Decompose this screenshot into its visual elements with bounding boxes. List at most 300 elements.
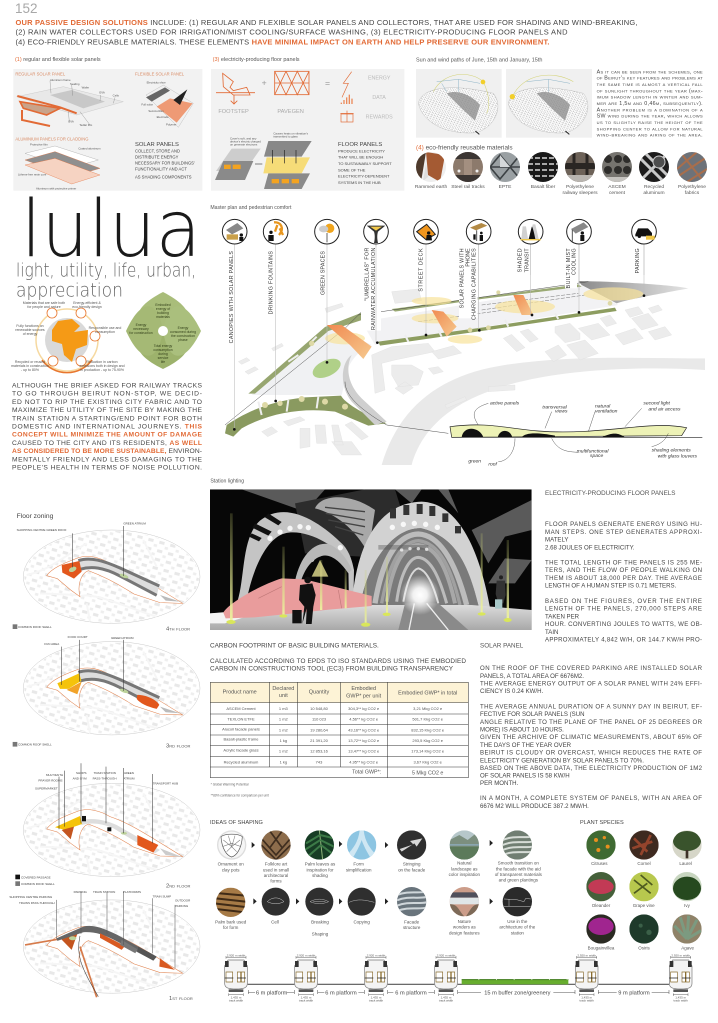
shaping captions: simplification — [346, 867, 372, 872]
silhouettes — [292, 575, 506, 624]
shaping captions: and green plantings — [499, 878, 539, 883]
icon: floor panel layers: Causes heats on vibration's — [273, 132, 309, 136]
icon: breaking — [305, 888, 333, 916]
plant captions: Agave — [681, 945, 695, 950]
shaping captions: for form — [223, 925, 239, 930]
diagram: green energy clover: building — [157, 311, 169, 315]
table: carbon footprint: Basalt-plastic frame — [223, 737, 259, 742]
panel: electricity-producing floor panels: (3) electricity-producing floor panels — [213, 57, 300, 63]
icon: drinking fountains — [263, 219, 288, 244]
callout icons and labels — [222, 219, 656, 431]
table: carbon footprint: 304,3** kg CO2 e — [348, 706, 380, 711]
icon: energy, data, rewards: ENERGY — [368, 75, 391, 81]
intro heading: (4) ECO-FRIENDLY REUSABLE MATERIALS. THESE ELEMENTS HAVE MINIMAL IMPACT ON EARTH AND HELP PRESERVE OUR ENVIRONMENT. — [16, 37, 550, 46]
diagram: globe of sustainability goals: of energy — [23, 332, 38, 336]
heading: plant species: PLANT SPECIES — [580, 820, 624, 826]
panel: floor zoning, 2nd floor: MULTIFAITH — [46, 773, 63, 777]
station roof and plaza — [225, 281, 688, 437]
shaping captions: forms — [270, 879, 282, 884]
table: carbon footprint: ASCEM Cement — [226, 706, 257, 711]
diagram: green energy clover: Energy — [178, 326, 189, 330]
plant: osiris — [629, 914, 659, 944]
icon: umbrellas — [364, 219, 388, 244]
icon: energy, data, rewards: REWARDS — [366, 114, 393, 120]
plant: ivy — [672, 872, 702, 901]
vertical callout labels: SHADED — [518, 248, 524, 272]
panel: floor zoning, 1st floor — [9, 890, 200, 1002]
section sketch: green — [468, 458, 481, 464]
intro heading: OUR PASSIVE DESIGN SOLUTIONS INCLUDE: (1) REGULAR AND FLEXIBLE SOLAR PANELS AND COLLECTORS, THAT ARE USED FOR SHADING AND WIND-BREAKING, — [16, 18, 638, 27]
shaping captions: clay pots — [222, 867, 240, 872]
panel: floor zoning, 2nd floor — [15, 763, 200, 889]
diagram: globe of sustainability goals: for people and nature — [27, 305, 61, 309]
floor panels description: SYSTEMS IN THE HUB — [338, 180, 381, 185]
solar panels description: COLLECT, STORE AND — [135, 149, 180, 154]
material: ETFE — [490, 152, 520, 182]
table: carbon footprint: GWP* per unit — [346, 694, 382, 700]
vertical callout labels — [229, 245, 644, 343]
panel: floor zoning, 4th floor: 4th floor — [166, 626, 190, 632]
shaping captions: Shaping — [312, 932, 329, 937]
solar panels description — [135, 142, 195, 179]
table: carbon footprint: Embodied — [351, 686, 376, 692]
2nd floor zones — [55, 763, 183, 857]
text: floor panels explanation: LENGTH OF THE PANELS, 270,000 STEPS ARE — [545, 606, 702, 612]
shaping captions: structure — [403, 925, 421, 930]
icon: flexible solar panel — [141, 80, 193, 127]
panel: floor zoning, 2nd floor: AND GYM — [73, 777, 87, 781]
shaping captions: shading — [312, 873, 328, 878]
shaping captions: Use in the — [507, 919, 528, 924]
plant: agave — [672, 914, 702, 944]
section sketch: roof — [488, 462, 498, 468]
text: solar panel explanation: FECTIVE FOR SOLAR PANELS (SUN — [480, 711, 585, 718]
vertical callout labels: RAINWATER ACCUMULATION — [371, 248, 377, 330]
icon: street deck — [414, 219, 438, 244]
diagram: globe of sustainability goals: in production - up to 75-90% — [80, 368, 124, 372]
icon: use in architecture — [503, 887, 532, 916]
section sketch: shading elements — [652, 448, 691, 454]
image: palm bark — [216, 888, 245, 917]
solar panels description: FUNCTIONALITY AND ACT — [135, 167, 187, 172]
text: solar panel explanation: PER MONTH. — [480, 780, 519, 787]
subtitle: appreciation — [16, 280, 123, 302]
icon: aluminium cladding panels — [18, 142, 101, 191]
table: carbon footprint: 501,7 Kkg CO2 e — [412, 717, 444, 722]
solar panels description: SOLAR PANELS — [135, 142, 179, 148]
icon: regular solar panel: Tedlar film — [79, 123, 93, 127]
diagram: globe of sustainability goals: renewable sources — [15, 328, 45, 332]
heading: solar panel: SOLAR PANEL — [480, 642, 524, 650]
diagram: globe of sustainability goals: Energy-efficient & — [73, 301, 101, 305]
icon: copying — [348, 888, 376, 916]
table: carbon footprint: 10 548,80 — [310, 706, 329, 711]
diagram: green energy clover: consumed during — [170, 330, 196, 334]
icon: floor panel layers: Cover's soft, and any — [230, 137, 257, 141]
icon: flexible solar panel: Electricity shoe — [147, 80, 166, 84]
text: floor panels explanation: 2.68 JOULES OF ELECTRICITY. — [545, 544, 635, 552]
panel: floor zoning, 3rd floor: FOOD COURT — [68, 635, 88, 639]
shaping captions: Facade — [404, 919, 420, 924]
subtitle: light, utility, life, urban, — [16, 260, 196, 282]
surrounding buildings — [238, 289, 672, 455]
text: solar panel explanation: PANELS, A TOTAL AREA OF 6676M2. — [480, 673, 584, 680]
shaping captions: Natural — [457, 861, 472, 866]
table: carbon footprint: 1 m3 — [279, 706, 289, 711]
table: carbon footprint: 13,47** kg CO2 e — [348, 749, 380, 754]
plant captions: Bougainvillea — [588, 945, 615, 950]
heading: carbon footprint: CALCULATED ACCORDING TO EPDS TO ISO STANDARDS USING THE EMBODIED — [210, 658, 466, 665]
shaping captions: Folklore art — [265, 862, 288, 867]
heading: electricity-producing floor panels: ELECTRICITY-PRODUCING FLOOR PANELS — [545, 490, 676, 497]
table: carbon footprint: Embodied GWP* in total — [398, 690, 457, 696]
vertical callout labels: PARKING — [635, 248, 641, 273]
vertical callout labels: PHONE — [465, 248, 471, 267]
plant: laurel — [672, 830, 702, 860]
table: carbon footprint: 43,16** kg CO2 e — [348, 727, 380, 732]
table: carbon footprint: 19 280,64 — [310, 727, 329, 732]
table: carbon footprint: 832,15 Kkg CO2 e — [411, 727, 445, 732]
shaping captions: landscape as — [451, 866, 478, 871]
shaping captions: inspiration for — [307, 867, 334, 872]
paths and trees across the green strips — [258, 313, 558, 415]
4th floor zones — [62, 526, 180, 602]
plant: bougainvillea — [586, 914, 616, 944]
floor panels description: TO SUSTAINABLY SUPPORT — [338, 161, 392, 166]
interior of right arch — [360, 528, 479, 607]
diagram: green energy clover: the construction — [171, 334, 195, 338]
icon: flexible solar panel: Polymer — [166, 122, 176, 126]
section sketch — [450, 400, 702, 468]
material captions: cement — [609, 190, 626, 196]
icon: floor panel layers: device's electric charged — [230, 140, 261, 144]
table: carbon footprint: **80% confidence for comparison per unit — [211, 793, 269, 797]
text: sun and wind description: of sunlight throughout the year (max- — [597, 88, 703, 94]
material: polyethylene fabrics — [677, 152, 707, 182]
panel: floor zoning, 3rd floor: COMMON ROOF SHELL — [18, 743, 52, 747]
diagram: globe of sustainability goals: materials in construction — [11, 364, 49, 368]
section sketch: active panels — [490, 400, 520, 406]
panel: electricity-producing floor panels — [211, 57, 404, 191]
panel: floor zoning, 2nd floor: PRAYER ROOMS — [38, 779, 62, 783]
table: carbon footprint: unit — [279, 693, 288, 699]
panel: floor zoning, 4th floor: SHOPPING CENTRE GREEN ROOF — [17, 528, 67, 532]
panel: floor zoning, 1st floor: OUTDOOR — [175, 899, 191, 903]
panel: sun and wind paths — [416, 57, 703, 139]
icon: regular solar panel: EVA — [68, 119, 74, 123]
heading: carbon footprint: CARBON FOOTPRINT OF BASIC BUILDING MATERIALS. — [210, 642, 379, 650]
icon: pavegen grid — [275, 71, 309, 95]
image: natural landscape — [450, 830, 479, 860]
table: carbon footprint: 13,72** kg CO2 e — [348, 738, 380, 743]
text: sun and wind description — [597, 69, 703, 139]
material captions: Polyethylene — [566, 184, 594, 190]
image: smooth transition facade — [503, 830, 532, 860]
icon: regular solar panel: Aluminum frame — [50, 78, 71, 82]
back arch — [315, 497, 375, 553]
right arch — [352, 502, 490, 607]
panel: master plan and pedestrian comfort — [210, 205, 705, 468]
diagram: green energy clover: energy of — [156, 307, 170, 311]
solar panels description: DISTRIBUTE ENERGY — [135, 155, 179, 160]
panel: floor zoning, 4th floor: GREEN ATRIUM — [123, 522, 146, 526]
panel: floor zoning, 1st floor: PLATFORMS — [123, 890, 141, 894]
material captions: EPTE — [499, 184, 512, 190]
icon: floor panel layers — [215, 132, 312, 189]
icon: regular solar panel: EVA — [99, 90, 105, 94]
solar panels description: NECESSARY FOR BUILDINGS' — [135, 161, 195, 166]
shaping captions: Ornament on — [218, 862, 244, 867]
icon: energy, data, rewards: DATA — [372, 95, 386, 101]
diagram: green energy clover: phase — [178, 338, 188, 342]
plant captions: Citruses — [591, 861, 608, 866]
vertical callout labels: CANOPIES WITH SOLAR PANELS — [229, 251, 235, 343]
text: floor panels explanation — [545, 521, 702, 644]
sun exposure zones — [325, 287, 643, 359]
panel: floor zoning, 2nd floor: TRANSPORT HUB — [153, 782, 178, 786]
shaping captions: Copying — [353, 919, 370, 924]
panel: regular and flexible solar panels: ALUMINIUM PANELS FOR CLADDING — [15, 136, 88, 141]
table: carbon footprint: 12 853,16 — [310, 749, 329, 754]
text: sun and wind description: of Beirut's key features and problems at — [597, 76, 703, 82]
icon: cell — [262, 888, 290, 916]
panel: floor zoning, 2nd floor: GREEN — [123, 771, 134, 775]
material captions — [415, 184, 706, 196]
text: floor panels explanation: TAIN — [545, 629, 558, 636]
text: floor panels explanation: THEM IS ABOUT 18,000 PER DAY. THE AVERAGE — [545, 575, 702, 582]
material captions: railway sleepers — [562, 190, 598, 196]
track section: 6 m platform — [256, 991, 288, 997]
plant captions: Osiris — [638, 945, 650, 950]
panel: regular and flexible solar panels: FLEXIBLE SOLAR PANEL — [135, 71, 185, 76]
diagram: globe of sustainability goals: eco-friendly design — [72, 305, 102, 309]
flow arrows — [252, 840, 493, 904]
icon: flexible solar panel: Semiconflex — [148, 109, 164, 113]
chart: January sun path — [508, 75, 588, 134]
table: carbon footprint: 293,5 Kkg CO2 e — [412, 738, 444, 743]
table: carbon footprint: Declared — [272, 686, 294, 692]
title: lulua: lulua — [21, 185, 201, 275]
text: floor panels explanation: TAKEN PER — [545, 614, 580, 620]
panel: floor zoning, 1st floor: TRAIN STATION — [93, 890, 115, 894]
text: floor panels explanation: THE TOTAL LENGTH OF THE PANELS IS 255 ME- — [545, 560, 702, 566]
panel: plant species — [586, 830, 702, 950]
table: carbon footprint: 4,56** kg CO2 e — [349, 717, 379, 722]
plant: citruses — [586, 830, 616, 860]
shaping captions: Cell — [271, 919, 279, 924]
section sketch: second light — [643, 400, 671, 406]
section sketch: natural — [595, 403, 611, 409]
shaping captions: used in small — [263, 867, 289, 872]
shaping captions: design features — [449, 930, 480, 935]
section sketch: transversal — [542, 404, 568, 410]
text: concept description: MENTALLY FRIENDLY AND LESS DAMAGING TO THE — [12, 456, 203, 463]
diagram: green energy clover: Energy — [136, 323, 147, 327]
panel: floor zoning, 4th floor: COMMON ROOF SHELL — [18, 625, 52, 629]
panel: regular and flexible solar panels: (1) regular and flexible solar panels — [15, 57, 101, 63]
image: folklore art — [261, 830, 291, 860]
second left arch — [294, 544, 352, 585]
plant captions: Ivy — [684, 903, 691, 908]
table: carbon footprint: 21 391,20 — [310, 738, 329, 743]
section sketch: with glass louvers — [658, 454, 698, 460]
plant captions: Cornel — [637, 861, 651, 866]
floor panels description: SOME OF THE — [338, 167, 366, 172]
vertical callout labels: DRINKING FOUNTAINS — [269, 251, 275, 314]
icon: flexible solar panel: Electrode — [157, 115, 169, 119]
image: palm leaves — [305, 830, 334, 860]
text: solar panel explanation: THE AVERAGE ENERGY OUTPUT OF A SOLAR PANEL WITH 24% EFFI- — [480, 680, 702, 688]
text: floor panels explanation: BASED ON THE FIGURES, OVER THE ENTIRE — [545, 598, 702, 605]
text: solar panel explanation: IN A MONTH, A COMPLETE SYSTEM OF PANELS, WITH AN AREA OF — [480, 795, 702, 802]
diagram: globe of sustainability goals — [11, 301, 125, 373]
diagram: green energy clover: for construction — [129, 331, 153, 335]
image: form simplification — [347, 830, 376, 860]
shaping captions: Smooth transition on — [498, 861, 539, 866]
text: solar panel explanation: GIVEN THE ARCHIVE OF CLIMATIC MEASUREMENTS, ABOUT 65% OF — [480, 734, 702, 741]
floor panels description: ELECTRICITY-DEPENDENT — [338, 174, 390, 179]
panel: floor zoning, 1st floor: PARKING — [74, 890, 88, 894]
shaping captions: station — [511, 930, 524, 935]
text: floor panels explanation: LENGTH OF A HUMAN STEP IS 0.71 METERS. — [545, 582, 677, 590]
panel: regular and flexible solar panels: REGULAR SOLAR PANEL — [15, 71, 66, 76]
icon: canopies — [222, 219, 247, 244]
table: carbon footprint: 5 Mkg CO2 e — [412, 771, 443, 777]
shaping captions: Nature — [458, 919, 472, 924]
panel: floor zoning, 2nd floor: COMMON ROOF SHELL — [21, 882, 55, 886]
icon: regular solar panel: Wafer — [82, 86, 89, 90]
table: carbon footprint: 1 kg — [280, 738, 287, 743]
icon: aluminium cladding panels: Aluminum with protective primer — [36, 187, 76, 191]
material captions: Polyethylene — [678, 184, 706, 190]
diagram: green energy clover: service — [158, 356, 168, 360]
panel: floor zoning, 3rd floor: 3rd floor — [166, 743, 191, 749]
text: concept description: MAXIMIZE THE UTILITY OF THE SITE BY MAKING THE — [12, 407, 203, 414]
panel: floor zoning, 2nd floor: PASS-THROUGH — [93, 777, 116, 781]
floor panels description: THAT WILL BE ENOUGH — [338, 155, 383, 160]
panel: electricity-producing floor panels: PAVEGEN — [277, 109, 304, 115]
text: sun and wind description: Another problem is a domination of a — [597, 107, 703, 113]
table: carbon footprint: * Global Warming Potential — [211, 783, 249, 787]
icon: green spaces — [315, 219, 339, 244]
text: concept description: PEOPLE'S HEALTH IN TERMS OF NOISE POLLUTION. — [12, 464, 202, 472]
text: solar panel explanation: ON THE ROOF OF THE COVERED PARKING ARE INSTALLED SOLAR — [480, 665, 703, 672]
material: polyethylene railway sleepers — [565, 152, 595, 182]
eco-friendly reusable materials: (4) eco-friendly reusable materials — [416, 144, 513, 152]
image: facade structure — [397, 887, 426, 916]
icon: regular solar panel: Sealing — [70, 82, 80, 86]
icon: footstep — [216, 73, 255, 104]
table: carbon footprint: Recycled aluminum — [224, 759, 259, 764]
diagram: green energy clover: Embodied — [155, 303, 171, 307]
panel: floor zoning, 3rd floor: GREEN ATRIUM — [111, 636, 134, 640]
panel: electricity-producing floor panels: = — [325, 78, 330, 88]
3rd floor zones — [57, 640, 180, 713]
material captions: Steel rail tracks — [451, 184, 485, 190]
panel: floor zoning, 2nd floor: SHOPS — [76, 771, 86, 775]
shaping captions: Form — [353, 862, 364, 867]
material captions: fabrics — [685, 190, 700, 196]
table: carbon footprint: 1 kg — [280, 759, 287, 764]
table: carbon footprint: 3,21 Mkg CO2 e — [413, 706, 443, 711]
text: floor panels explanation: FLOOR PANELS GENERATE ENERGY USING HU- — [545, 521, 702, 528]
table: carbon footprint: Quantity — [309, 690, 329, 696]
heading: ideas of shaping: IDEAS OF SHAPING — [210, 820, 263, 826]
shaping captions: of transparent materials — [495, 872, 543, 877]
icon: aluminium cladding panels: Protective film — [30, 142, 48, 146]
icon: aluminium cladding panels: Lithene-free resin core — [18, 172, 47, 176]
diagram: green energy clover: materials — [156, 315, 170, 319]
table: carbon footprint: 1 m2 — [279, 727, 289, 732]
text: sun and wind description: the same time is almost a vertical fall — [597, 82, 703, 88]
shaping captions: wonders as — [453, 925, 477, 930]
icon: floor panel layers: on generate electrons — [230, 143, 258, 147]
panel: floor zoning, 2nd floor: TRAIN STATION — [94, 771, 116, 775]
panel: floor zoning, 2nd floor: 2nd floor — [166, 883, 191, 889]
panel: floor zoning, 1st floor: SHOPPING CENTRE PARKING — [9, 895, 53, 899]
platform floor — [210, 605, 532, 630]
text: solar panel explanation: BASED ON THE ABOVE DATA, THE ELECTRICITY PRODUCTION OF 1M2 — [480, 765, 703, 772]
panel: floor zoning, 3rd floor: FUN AREA — [44, 642, 59, 646]
vertical callout labels: CHARGING CAPABILITIES — [472, 248, 478, 320]
text: floor panels explanation: HOUR. CONVERTING JOULES TO WATTS, WE OB- — [545, 621, 702, 628]
shaping captions: architectural — [264, 873, 288, 878]
image: ornament on clay pots — [218, 831, 246, 859]
panel: regular and flexible solar panels — [13, 57, 202, 191]
table: carbon footprint: 3,67 Kkg CO2 e — [413, 759, 443, 764]
panel: floor zoning, 1st floor: 1st floor — [169, 996, 193, 1002]
panel: station lighting render: Station lighting — [210, 479, 244, 485]
section sketch: ventilation — [595, 409, 618, 415]
plant captions: Laurel — [679, 861, 692, 866]
material: rammed earth — [416, 152, 446, 182]
panel: floor zoning, 2nd floor: COVERED PASSAGE — [21, 875, 51, 879]
shaping captions: color inspiration — [449, 872, 481, 877]
image: nature wonders — [450, 887, 479, 916]
material captions: Recycled — [644, 184, 664, 190]
table: carbon footprint: 743 — [316, 759, 323, 764]
diagram: globe of sustainability goals: Materials that are safe both — [23, 301, 65, 305]
icon: floor panel layers: transmitted to glass — [273, 135, 298, 139]
text: sun and wind description: shopping center to allow for natural — [597, 126, 703, 132]
text: solar panel explanation: MORE) IS ABOUT 10 HOURS. — [480, 726, 564, 734]
panel: floor zoning, 4th floor — [13, 513, 200, 632]
floor panels description: FLOOR PANELS — [338, 142, 382, 148]
text: sun and wind description: wind-breaking and airing of the area. — [597, 133, 703, 139]
icon: energy, data, rewards — [340, 72, 393, 122]
shaping captions: on the facade — [398, 867, 426, 872]
shaping captions: Palm leaves as — [305, 862, 336, 867]
diagram: globe of sustainability goals: Fully functions on — [16, 324, 44, 328]
diagram: green energy clover: consumption — [153, 348, 173, 352]
text: sun and wind description: us to slightly raise the height of the — [597, 120, 703, 126]
page number: 152 — [15, 1, 38, 16]
track section: 6 m platform — [325, 991, 357, 997]
train — [223, 578, 372, 618]
panel: floor zoning, 1st floor: TRAINS PASS-THROUGH — [19, 901, 55, 905]
text: solar panel explanation: ELECTRICITY GENERATION BY SOLAR PANELS TO 70%. — [480, 758, 644, 764]
river road band — [382, 358, 705, 465]
table: carbon footprint: Alucoil facade panels — [222, 727, 260, 732]
shaping captions: the facade with the aid — [496, 866, 541, 871]
material captions: ASCEM — [608, 184, 626, 190]
panel: floor zoning, 3rd floor — [13, 635, 200, 749]
panel: station lighting render — [210, 479, 532, 630]
plant captions — [588, 861, 695, 950]
plant: oleander — [586, 872, 616, 901]
icon: shaded transit — [518, 219, 543, 244]
plant: grape vine — [629, 872, 659, 901]
